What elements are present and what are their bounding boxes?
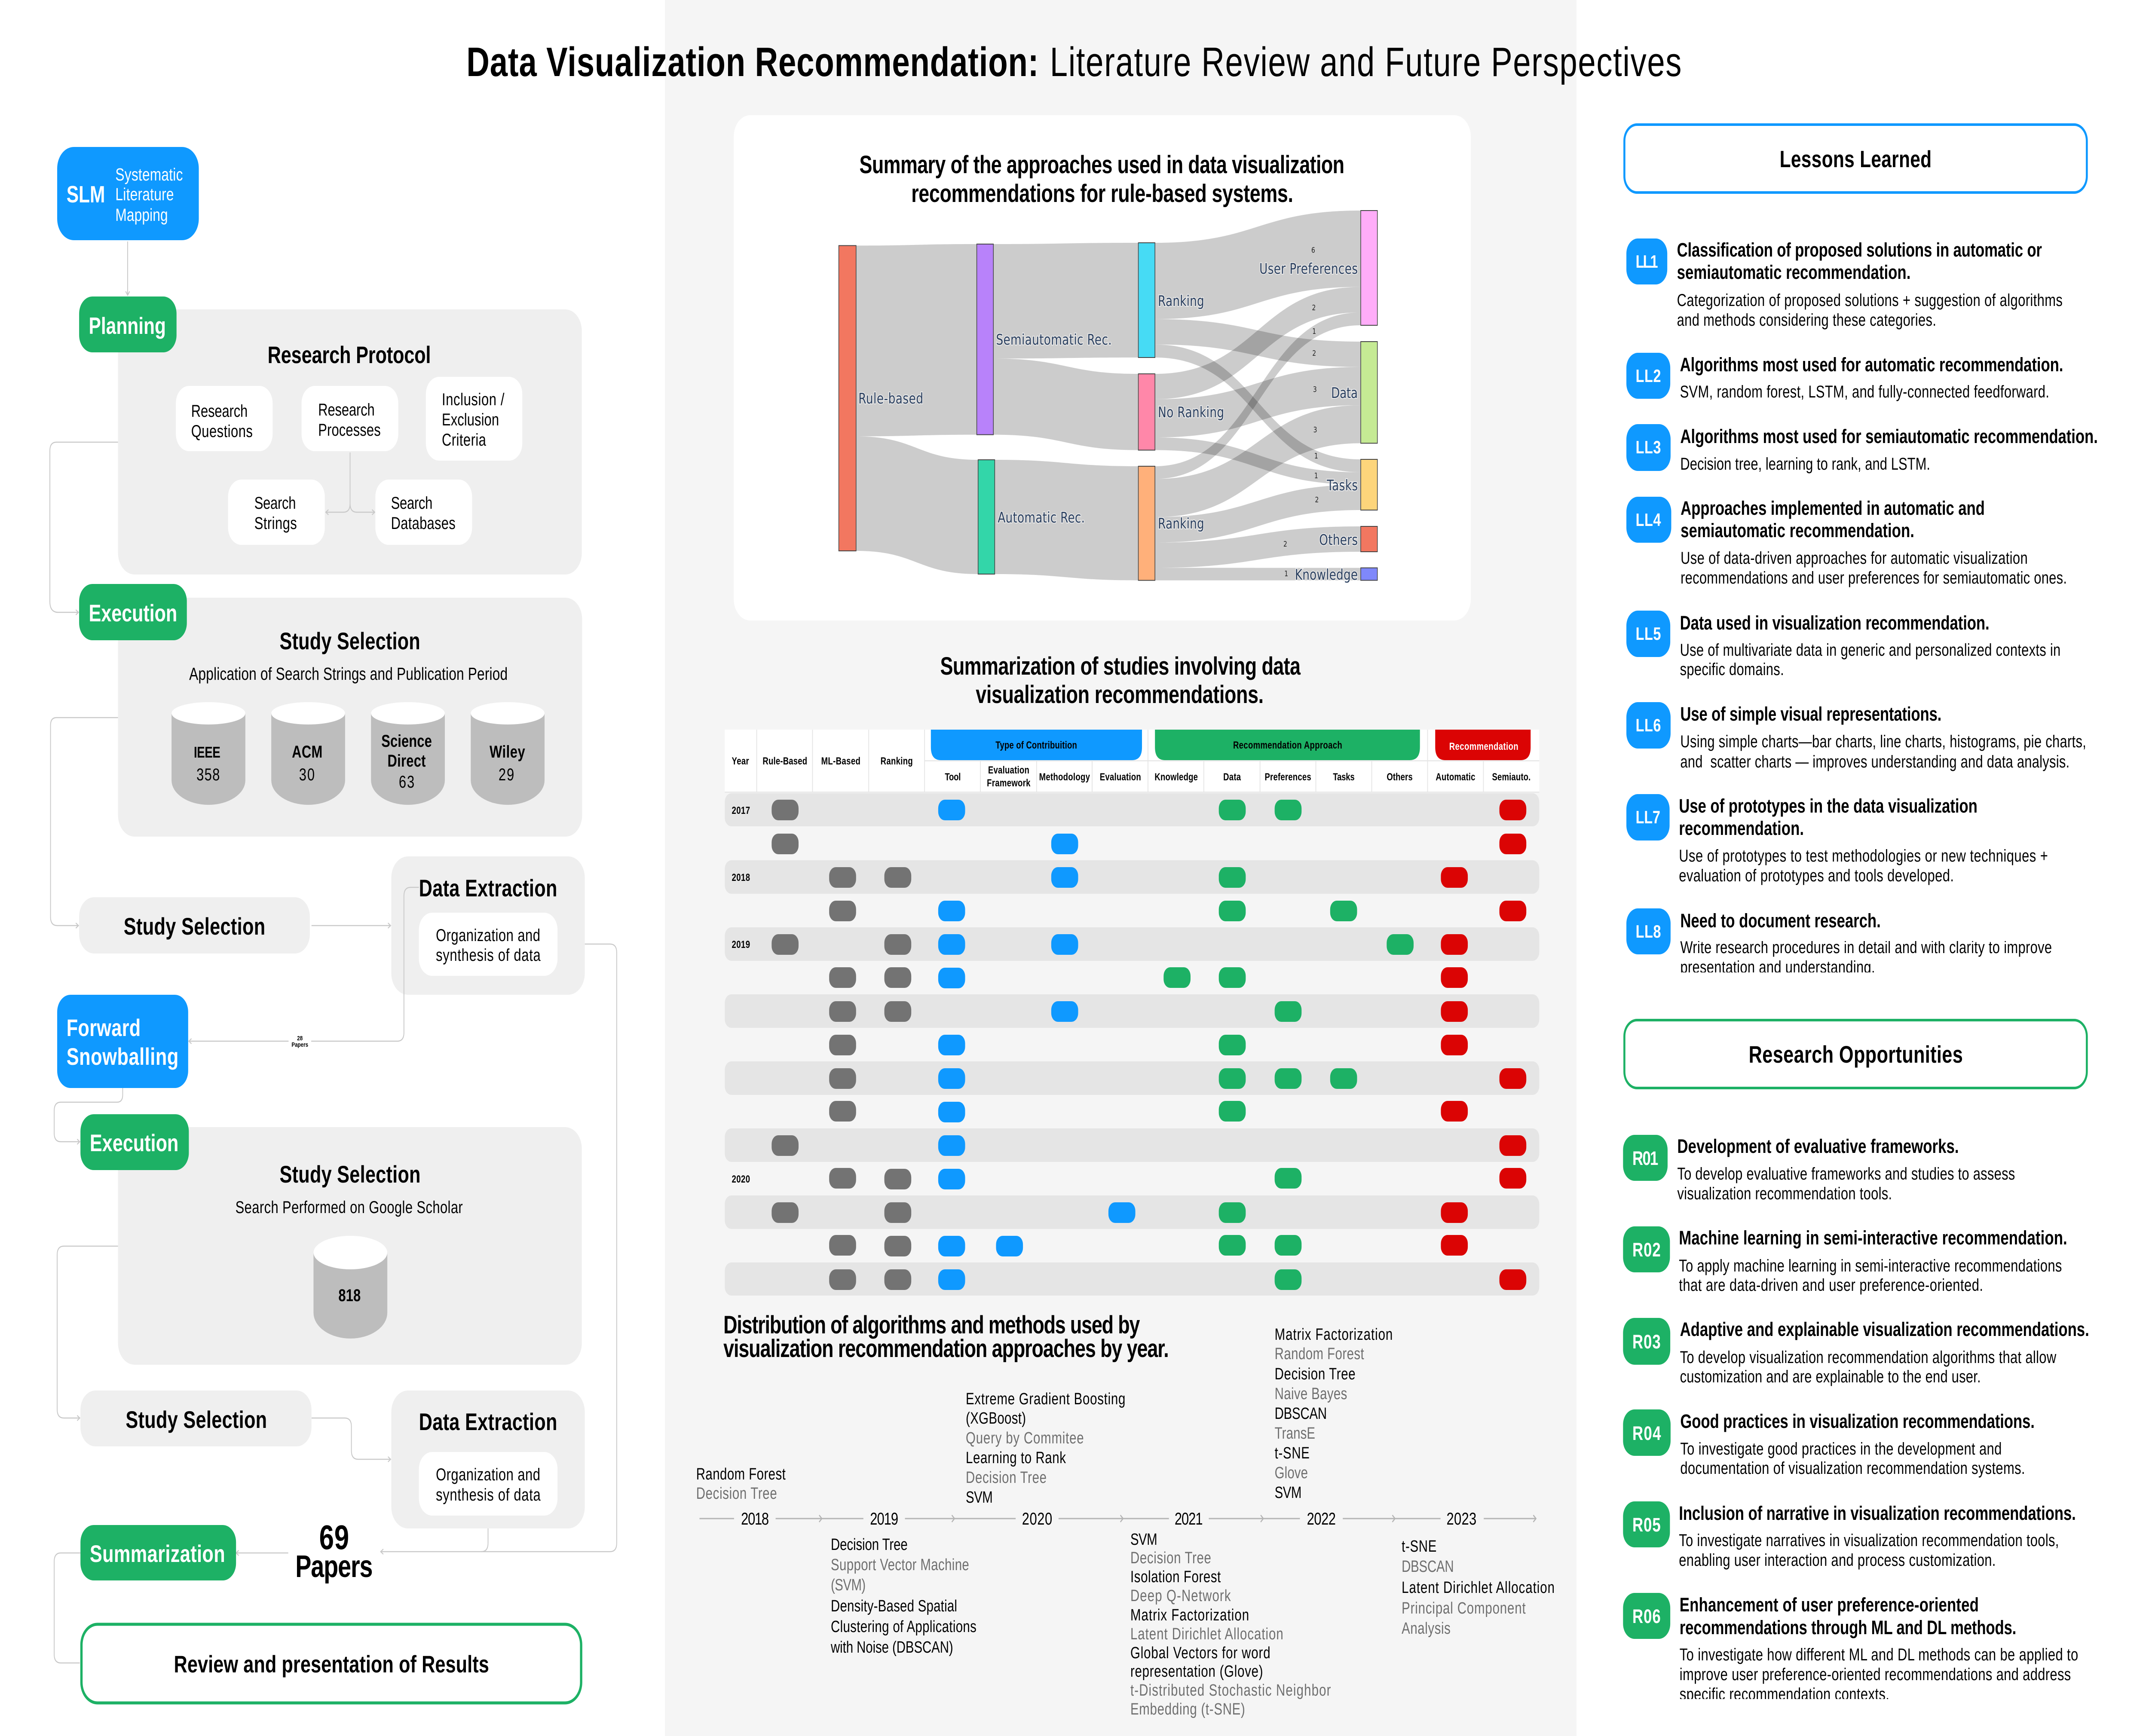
badge: execution second: Execution (90, 1130, 178, 1156)
timeline methods 2021: Matrix Factorization (1130, 1606, 1249, 1624)
timeline methods 2020: SVM (966, 1488, 993, 1507)
lesson LL5 (1626, 611, 2060, 679)
timeline methods 2023: Latent Dirichlet Allocation (1402, 1578, 1555, 1597)
label: 28 papers: 28 (297, 1035, 303, 1042)
title: Literature Review and Future Perspectives (1050, 39, 1681, 85)
heading: sankey: Summary of the approaches used in data visualization (860, 150, 1344, 178)
lesson LL7: LL7 (1636, 807, 1660, 827)
pill: study selection (79, 897, 310, 954)
cylinder: 818 (313, 1236, 387, 1339)
timeline methods 2022: TransE (1275, 1424, 1315, 1443)
opportunity R06: recommendations through ML and DL methods. (1680, 1617, 2016, 1638)
box: search strings (228, 480, 325, 545)
lesson LL5: Use of multivariate data in generic and personalized contexts in (1680, 640, 2060, 660)
row 3 markers (829, 867, 1468, 888)
lesson LL2: Algorithms most used for automatic recommendation. (1680, 354, 2063, 376)
timeline methods 2019 (830, 1535, 977, 1657)
title: Data Visualization Recommendation: (466, 39, 1038, 85)
sankey link values (1283, 245, 1319, 578)
box: search strings: Strings (254, 513, 297, 533)
sankey node labels: User Preferences (1259, 261, 1358, 278)
label: 69 papers (295, 1518, 373, 1584)
heading: table (940, 652, 1301, 708)
group header: type of contribution: Type of Contribuition (995, 740, 1077, 751)
heading: timeline: Distribution of algorithms and methods used by (723, 1311, 1140, 1339)
cylinder: ACM (271, 702, 345, 805)
column headers: Evaluation (988, 764, 1029, 776)
badge: planning: Planning (89, 313, 166, 339)
sankey link values: 2 (1312, 348, 1316, 358)
lesson LL3: Decision tree, learning to rank, and LSTM. (1680, 454, 1930, 474)
opportunity R02: R02 (1632, 1239, 1661, 1261)
timeline methods 2021: representation (Glove) (1130, 1662, 1263, 1681)
lesson LL3: LL3 (1636, 437, 1661, 457)
opportunity R01 (1623, 1135, 2015, 1203)
lesson LL8: presentation and understanding. (1680, 957, 1875, 977)
row 1 markers (771, 800, 1526, 820)
lesson LL1: Categorization of proposed solutions + suggestion of algorithms (1677, 290, 2063, 310)
box: research processes (302, 386, 398, 451)
cylinder: Wiley: 29 (499, 765, 514, 784)
panel: data extraction (391, 856, 585, 995)
badge: planning (79, 296, 177, 352)
row 14 markers (829, 1235, 1468, 1256)
row 12 markers (829, 1168, 1526, 1189)
SLM badge: Systematic (115, 165, 183, 184)
year labels (732, 805, 750, 1185)
heading: sankey (860, 150, 1344, 207)
sankey link values: 2 (1315, 495, 1319, 504)
SLM badge: Literature (115, 184, 174, 204)
timeline methods 2021: Decision Tree (1130, 1549, 1211, 1567)
opportunity R02 (1623, 1226, 2067, 1295)
cylinder: Wiley: Wiley (490, 742, 525, 761)
badge: summarization: Summarization (90, 1540, 225, 1567)
row 9 markers (829, 1068, 1526, 1089)
timeline methods 2021: Latent Dirichlet Allocation (1130, 1625, 1283, 1643)
opportunity R04: documentation of visualization recommendation systems. (1680, 1458, 2025, 1478)
SLM badge (57, 147, 199, 240)
row 11 markers (771, 1135, 1526, 1156)
lesson LL4: LL4 (1636, 510, 1661, 530)
lesson LL2: LL2 (1636, 366, 1661, 386)
panel: research protocol (118, 309, 582, 575)
lesson LL7: evaluation of prototypes and tools developed. (1679, 866, 1954, 885)
opportunity R06 (1623, 1593, 2078, 1704)
group header: recommendation: Recommendation (1449, 741, 1518, 752)
sankey node labels: Others (1319, 532, 1358, 549)
box: search databases (375, 480, 472, 545)
lesson LL8: Need to document research. (1680, 910, 1881, 932)
opportunity R05: R05 (1632, 1514, 1661, 1536)
sankey link values: 3 (1313, 425, 1317, 434)
column headers (732, 755, 1531, 789)
badge: execution second (80, 1114, 189, 1170)
row 2 markers (771, 834, 1526, 854)
opportunity R04: To investigate good practices in the development and (1680, 1439, 2002, 1458)
row 4 markers (829, 901, 1526, 921)
opportunity R06: improve user preference-oriented recommendations and address (1680, 1665, 2071, 1684)
cylinder: Wiley (471, 702, 545, 805)
cylinder: ACM: 30 (299, 765, 315, 784)
box: search databases: Databases (391, 513, 456, 533)
column headers: Framework (987, 777, 1031, 789)
row 7 markers (829, 1001, 1468, 1022)
lesson LL4 (1626, 497, 2067, 587)
label: 69 papers: Papers (295, 1549, 373, 1584)
heading: table: visualization recommendations. (976, 680, 1264, 708)
heading: table: Summarization of studies involving data (940, 652, 1301, 680)
sankey link values: 3 (1313, 385, 1317, 394)
badge: forward snowballing: Snowballing (67, 1043, 178, 1070)
lesson LL2 (1626, 353, 2063, 401)
column headers: ML-Based (821, 755, 860, 767)
timeline methods 2020: (XGBoost) (966, 1409, 1026, 1427)
connector: research processes to search boxes (326, 452, 375, 515)
heading: timeline (723, 1311, 1169, 1362)
box: research questions: Questions (191, 422, 253, 441)
column headers: Rule-Based (762, 755, 807, 767)
column headers: Tasks (1333, 771, 1355, 783)
sankey link values: 1 (1284, 569, 1288, 578)
lesson LL7 (1626, 794, 2048, 885)
heading box: lessons learned (1624, 125, 2087, 193)
opportunity R06: Enhancement of user preference-oriented (1680, 1594, 1979, 1616)
opportunity R01: visualization recommendation tools. (1677, 1184, 1892, 1203)
badge: forward snowballing (57, 995, 188, 1088)
column headers: Tool (945, 771, 961, 783)
lesson LL6 (1626, 702, 2086, 771)
year labels: 2018 (732, 872, 750, 883)
opportunity R04: R04 (1632, 1423, 1661, 1444)
timeline methods 2019: Decision Tree (831, 1535, 908, 1554)
year labels: 2019 (732, 939, 750, 951)
panel: data extraction second (391, 1391, 585, 1528)
timeline methods 2021: Isolation Forest (1130, 1568, 1221, 1586)
sankey node labels: No Ranking (1158, 404, 1224, 421)
pill: study selection: Study Selection (124, 913, 265, 940)
timeline methods 2023 (1402, 1537, 1555, 1638)
box: research processes: Research (318, 400, 375, 419)
timeline methods 2019: Density-Based Spatial (831, 1597, 957, 1615)
heading: research protocol: Research Protocol (268, 342, 431, 368)
timeline methods 2021: SVM (1130, 1530, 1157, 1549)
year labels: 2017 (732, 805, 750, 816)
cylinder: Science Direct (371, 702, 445, 805)
lesson LL1: LL1 (1636, 251, 1658, 272)
sankey node labels: Ranking (1158, 516, 1204, 532)
badge: execution: Execution (89, 600, 177, 627)
timeline methods 2022: SVM (1275, 1483, 1301, 1502)
SLM badge: SLM (67, 181, 105, 208)
SLM badge: Mapping (115, 205, 168, 225)
box: organization and synthesis second (419, 1452, 557, 1516)
row 6 markers (829, 967, 1468, 988)
label: 28 papers (288, 1035, 311, 1048)
timeline methods 2020: Query by Commitee (966, 1429, 1084, 1447)
lesson LL4: Approaches implemented in automatic and (1681, 498, 1985, 519)
column headers: Knowledge (1154, 771, 1198, 783)
sankey node labels: Rule-based (858, 391, 923, 407)
opportunity R02: that are data-driven and user preference-oriented. (1679, 1275, 1983, 1295)
column headers: Automatic (1436, 771, 1476, 783)
row 5 markers (771, 934, 1468, 955)
panel: study selection google scholar (118, 1127, 582, 1365)
heading: timeline: visualization recommendation approaches by year. (723, 1334, 1169, 1362)
heading: study selection: Study Selection (280, 1161, 420, 1188)
heading: study selection: Study Selection (280, 628, 420, 654)
opportunity R02: To apply machine learning in semi-interactive recommendations (1679, 1256, 2062, 1275)
year labels: 2020 (732, 1174, 750, 1185)
box: organization and synthesis second: synthesis of data (436, 1485, 541, 1504)
sankey link values: 1 (1312, 327, 1316, 336)
sankey link values: 2 (1312, 303, 1316, 312)
group header: recommendation approach (1155, 730, 1420, 760)
timeline methods 2019: (SVM) (831, 1576, 866, 1594)
timeline methods 2020: Extreme Gradient Boosting (966, 1390, 1125, 1408)
repeat of connector over panel (404, 887, 419, 995)
lesson LL1: and methods considering these categories. (1677, 310, 1936, 330)
box: research questions: Research (191, 401, 248, 421)
opportunity R03: Adaptive and explainable visualization recommendations. (1680, 1319, 2089, 1340)
center column background (665, 0, 1577, 1736)
panel: study selection with databases (118, 598, 582, 837)
opportunity R06: specific recommendation contexts. (1680, 1684, 1889, 1704)
lesson LL8 (1626, 908, 2052, 977)
group header: recommendation approach: Recommendation Approach (1233, 740, 1342, 751)
lesson LL4: Use of data-driven approaches for automatic visualization (1681, 548, 2028, 568)
cylinder: IEEE (171, 702, 245, 805)
column headers: Evaluation (1100, 771, 1141, 783)
opportunity R03 (1623, 1318, 2089, 1386)
timeline axis: 2021 (1175, 1509, 1203, 1528)
box: inclusion exclusion criteria: Criteria (442, 430, 486, 449)
panel: data extraction: Data Extraction (419, 875, 557, 902)
box: research questions (176, 386, 272, 451)
box: research processes: Processes (318, 420, 381, 440)
column headers: Others (1387, 771, 1413, 783)
lesson LL8: Write research procedures in detail and with clarity to improve (1680, 938, 2052, 957)
box: organization and synthesis: Organization and (436, 926, 540, 945)
box: review and presentation: Review and presentation of Results (174, 1651, 489, 1678)
subtitle: search strings: Application of Search Strings and Publication Period (189, 664, 508, 684)
column headers: Data (1223, 771, 1241, 783)
timeline methods 2021: t-Distributed Stochastic Neighbor (1130, 1681, 1331, 1699)
sankey links (856, 211, 1361, 581)
column headers: Year (732, 755, 749, 767)
row 13 markers (771, 1202, 1468, 1223)
opportunity R06: R06 (1632, 1606, 1661, 1627)
heading box: lessons learned: Lessons Learned (1780, 146, 1932, 172)
badge: summarization (80, 1525, 236, 1580)
opportunity R02: Machine learning in semi-interactive recommendation. (1679, 1227, 2067, 1249)
box: review and presentation (82, 1624, 581, 1703)
panel: sankey card (734, 115, 1471, 620)
lesson LL8: LL8 (1636, 921, 1661, 941)
opportunity R04 (1623, 1409, 2035, 1478)
cylinder: Science Direct: Science (381, 731, 432, 751)
opportunity R03: To develop visualization recommendation algorithms that allow (1680, 1348, 2056, 1367)
subtitle: google scholar: Search Performed on Google Scholar (236, 1198, 463, 1217)
group header: type of contribution (931, 730, 1142, 760)
lesson LL7: recommendation. (1679, 818, 1804, 839)
label: 69 papers: 69 (319, 1518, 349, 1557)
box: inclusion exclusion criteria (426, 377, 522, 461)
heading box: research opportunities: Research Opportunities (1749, 1041, 1963, 1068)
opportunity R03: customization and are explainable to the end user. (1680, 1367, 1981, 1386)
row 15 markers (829, 1269, 1526, 1290)
lesson LL7: Use of prototypes to test methodologies or new techniques + (1679, 846, 2048, 865)
column headers: Methodology (1039, 771, 1090, 783)
label: 28 papers: Papers (291, 1041, 308, 1048)
cylinder: Science Direct: Direct (388, 751, 426, 770)
timeline methods 2018 (696, 1465, 786, 1503)
timeline methods 2021: Deep Q-Network (1130, 1586, 1231, 1605)
box: search databases: Search (391, 493, 432, 513)
opportunity R01: Development of evaluative frameworks. (1677, 1136, 1959, 1157)
timeline axis (699, 1509, 1536, 1528)
timeline methods 2019: Clustering of Applications (831, 1617, 977, 1636)
pill: study selection second: Study Selection (126, 1406, 267, 1433)
badge: forward snowballing: Forward (67, 1015, 141, 1041)
heading: sankey: recommendations for rule-based systems. (911, 179, 1293, 207)
opportunity R06: To investigate how different ML and DL methods can be applied to (1680, 1645, 2078, 1664)
connector lines of the process flow (50, 241, 617, 1663)
timeline methods 2023: t-SNE (1402, 1537, 1436, 1556)
badge: execution (79, 584, 187, 640)
pill: study selection second (80, 1391, 312, 1446)
sankey node labels: Data (1331, 385, 1358, 402)
opportunity R05: enabling user interaction and process customization. (1679, 1550, 1996, 1570)
lesson LL1 (1626, 238, 2063, 330)
lesson LL1: semiautomatic recommendation. (1677, 262, 1910, 283)
timeline methods 2020: Learning to Rank (966, 1449, 1066, 1467)
lesson LL5: Data used in visualization recommendation. (1680, 612, 1990, 634)
box: search strings: Search (254, 493, 296, 513)
cylinder: 818: 818 (338, 1286, 361, 1305)
lesson LL2: SVM, random forest, LSTM, and fully-connected feedforward. (1680, 382, 2049, 401)
table row bands (725, 793, 1539, 1296)
lesson LL5: LL5 (1636, 623, 1661, 644)
cylinder: IEEE: IEEE (194, 744, 220, 761)
lesson LL7: Use of prototypes in the data visualization (1679, 795, 1978, 817)
opportunity R05: Inclusion of narrative in visualization recommendations. (1679, 1503, 2076, 1524)
group header: recommendation (1435, 730, 1531, 760)
opportunity R01: To develop evaluative frameworks and studies to assess (1677, 1164, 2015, 1183)
column headers: Ranking (881, 755, 913, 767)
timeline axis: 2019 (870, 1509, 898, 1528)
opportunity R03: R03 (1632, 1331, 1661, 1353)
lesson LL1: Classification of proposed solutions in automatic or (1677, 239, 2042, 261)
heading box: research opportunities (1624, 1020, 2087, 1088)
sankey node labels (858, 261, 1358, 584)
timeline methods 2018: Random Forest (696, 1465, 786, 1483)
opportunity R04: Good practices in visualization recommendations. (1680, 1411, 2035, 1432)
lesson LL3 (1626, 424, 2098, 474)
lesson LL6: and scatter charts — improves understanding and data analysis. (1680, 752, 2069, 771)
lesson LL6: LL6 (1636, 715, 1661, 735)
lesson LL6: Using simple charts—bar charts, line charts, histograms, pie charts, (1680, 732, 2086, 751)
timeline methods 2022: Matrix Factorization (1275, 1325, 1393, 1344)
timeline methods 2023: Analysis (1402, 1619, 1451, 1638)
sankey link values: 6 (1311, 245, 1315, 254)
opportunity R05 (1623, 1501, 2076, 1570)
sankey node labels: Automatic Rec. (998, 510, 1085, 526)
timeline methods 2022: t-SNE (1275, 1444, 1310, 1462)
timeline methods 2021: Embedding (t-SNE) (1130, 1700, 1245, 1718)
box: organization and synthesis second: Organization and (436, 1465, 540, 1484)
timeline methods 2019: with Noise (DBSCAN) (830, 1638, 953, 1657)
timeline methods 2022: Glove (1275, 1464, 1308, 1482)
sankey node labels: Knowledge (1295, 567, 1358, 584)
sankey nodes (839, 211, 1378, 581)
sankey node labels: Tasks (1326, 477, 1358, 494)
timeline methods 2022: Decision Tree (1275, 1365, 1356, 1383)
lesson LL3: Algorithms most used for semiautomatic recommendation. (1680, 426, 2098, 447)
sankey link values: 2 (1283, 539, 1287, 548)
timeline methods 2022: Naive Bayes (1275, 1385, 1347, 1403)
timeline axis: 2018 (741, 1509, 769, 1528)
lesson LL4: recommendations and user preferences for semiautomatic ones. (1681, 568, 2067, 587)
lesson LL6: Use of simple visual representations. (1680, 703, 1941, 725)
sankey node labels: Ranking (1158, 293, 1204, 310)
panel: data extraction second: Data Extraction (419, 1409, 557, 1435)
column headers: Semiauto. (1492, 771, 1531, 783)
lesson LL5: specific domains. (1680, 660, 1784, 679)
timeline methods 2019: Support Vector Machine (831, 1556, 969, 1574)
timeline axis: 2023 (1447, 1509, 1476, 1528)
sankey node labels: Semiautomatic Rec. (996, 332, 1112, 348)
opportunity R01: R01 (1632, 1148, 1658, 1169)
sankey link values: 1 (1314, 471, 1318, 480)
table header (725, 730, 1539, 792)
title (466, 39, 1681, 85)
lesson LL4: semiautomatic recommendation. (1681, 520, 1914, 541)
timeline methods 2023: Principal Component (1402, 1599, 1526, 1617)
cylinder: IEEE: 358 (196, 765, 220, 784)
timeline methods 2022 (1275, 1325, 1393, 1502)
cylinder: Science Direct: 63 (399, 772, 414, 792)
timeline methods 2023: DBSCAN (1402, 1557, 1454, 1576)
timeline axis: 2022 (1307, 1509, 1336, 1528)
sankey link values: 1 (1314, 451, 1318, 460)
timeline methods 2018: Decision Tree (696, 1484, 777, 1503)
cylinder: ACM: ACM (292, 742, 322, 761)
column headers: Preferences (1264, 771, 1311, 783)
box: inclusion exclusion criteria: Exclusion (442, 410, 499, 429)
timeline methods 2022: Random Forest (1275, 1345, 1364, 1363)
timeline methods 2021: Global Vectors for word (1130, 1644, 1270, 1662)
box: inclusion exclusion criteria: Inclusion / (442, 390, 504, 409)
box: organization and synthesis: synthesis of data (436, 945, 541, 965)
timeline methods 2022: DBSCAN (1275, 1404, 1327, 1423)
timeline methods 2020 (966, 1390, 1125, 1507)
box: organization and synthesis (419, 913, 557, 976)
opportunity R05: To investigate narratives in visualization recommendation tools, (1679, 1531, 2059, 1550)
row 8 markers (829, 1035, 1468, 1055)
timeline axis: 2020 (1022, 1509, 1052, 1528)
row 10 markers (829, 1101, 1468, 1122)
timeline methods 2020: Decision Tree (966, 1468, 1047, 1487)
timeline methods 2021 (1130, 1530, 1331, 1718)
